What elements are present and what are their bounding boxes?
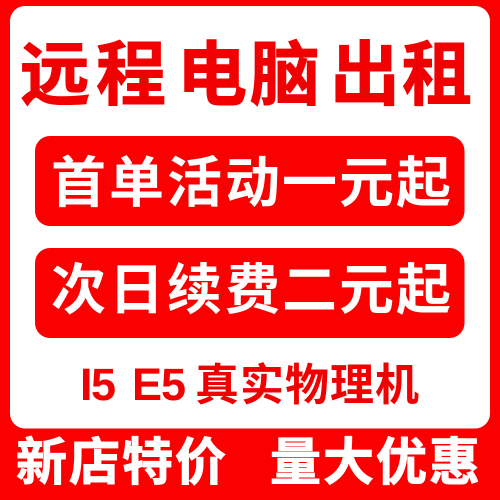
processor labels: I5E5 (80, 359, 186, 410)
first offer text: 首单活动一元起 (51, 152, 451, 214)
title: 远程电脑出租 (20, 36, 472, 114)
footer: bulk discount: 量大优惠 (270, 434, 480, 491)
panel: second offer pill (35, 248, 464, 338)
panel: first offer pill (35, 136, 464, 226)
second offer text: 次日续费二元起 (51, 259, 451, 321)
hardware line (80, 359, 419, 410)
physical machine text: 真实物理机 (195, 361, 419, 410)
footer: new store special price: 新店特价 (16, 434, 226, 491)
pill background (35, 248, 464, 338)
pill background (35, 136, 464, 226)
